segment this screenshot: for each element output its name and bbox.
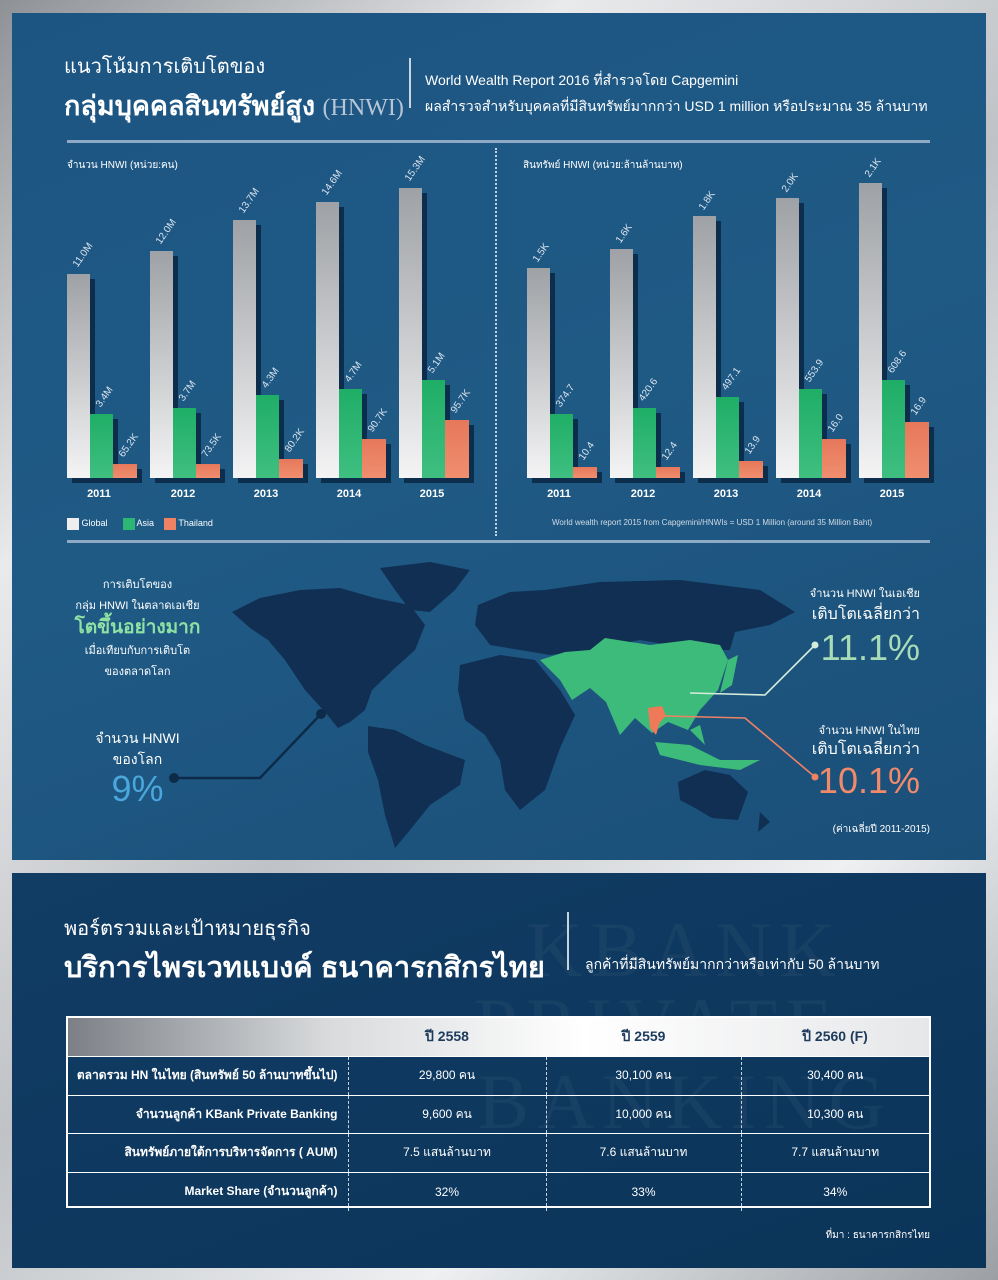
watermark: PRIVATE	[474, 982, 841, 1069]
table: 7.7 แสนล้านบาท	[791, 1145, 879, 1159]
text: 2011	[547, 488, 571, 500]
text: 2.1K	[863, 156, 884, 179]
text: 13.7M	[237, 186, 262, 215]
text: 420.6	[637, 377, 660, 403]
text: 374.7	[554, 383, 577, 409]
text: 80.2K	[283, 427, 307, 454]
heading: private banking: บริการไพรเวทแบงค์ ธนาคารกสิกรไทย	[64, 952, 545, 984]
table: ปี 2560 (F)	[802, 1028, 868, 1044]
title: แนวโน้มการเติบโตของ	[64, 56, 265, 78]
callout: asia growth text: การเติบโตของ	[103, 579, 172, 591]
table: 30,400 คน	[807, 1068, 863, 1082]
callout: asia growth text: โตขึ้นอย่างมาก	[75, 617, 200, 638]
text: 95.7K	[449, 388, 473, 415]
callout: thai 10.1%	[812, 724, 920, 801]
text: 10.4	[577, 440, 597, 462]
text: 4.3M	[260, 366, 282, 390]
table: ตลาดรวม HN ในไทย (สินทรัพย์ 50 ล้านบาทขึ้นไป)	[77, 1068, 338, 1082]
callout: thai 10.1%: เติบโตเฉลี่ยกว่า	[812, 741, 920, 758]
text: 90.7K	[366, 407, 390, 434]
callout: thai 10.1%: จำนวน HNWI ในไทย	[819, 725, 920, 737]
text: 12.4	[660, 440, 680, 462]
callout: asia growth text: เมื่อเทียบกับการเติบโต	[85, 645, 190, 657]
text: 13.9	[743, 434, 763, 456]
text: 2014	[797, 488, 821, 500]
callout: asia 11.1%	[810, 587, 920, 668]
text: 2013	[714, 488, 738, 500]
callout: asia 11.1%: จำนวน HNWI ในเอเชีย	[810, 588, 920, 600]
heading: private banking	[64, 918, 545, 984]
callout: asia growth text: ของตลาดโลก	[104, 666, 170, 678]
note: (ค่าเฉลี่ยปี 2011-2015)	[833, 824, 930, 835]
text: 15.3M	[403, 154, 428, 183]
text: 608.6	[886, 349, 909, 375]
table: สินทรัพย์ภายใต้การบริหารจัดการ ( AUM)	[124, 1145, 338, 1159]
callout: world 9%: 9%	[111, 768, 164, 809]
text: 3.7M	[177, 379, 199, 403]
table: 34%	[823, 1184, 847, 1198]
subtitle: private banking: ลูกค้าที่มีสินทรัพย์มากกว่าหรือเท่ากับ 50 ล้านบาท	[585, 956, 880, 972]
callout: asia 11.1%: 11.1%	[821, 627, 920, 668]
text: 2012	[171, 488, 195, 500]
world map	[169, 562, 818, 848]
subtitle: World Wealth Report 2016 ที่สำรวจโดย Capgemini	[425, 72, 738, 88]
callout: world 9%	[95, 730, 180, 809]
title: กลุ่มบุคคลสินทรัพย์สูง (HNWI)	[64, 91, 404, 121]
table: จำนวนลูกค้า KBank Private Banking	[136, 1107, 338, 1121]
table: Market Share (จำนวนลูกค้า)	[184, 1184, 338, 1198]
text: 1.5K	[531, 241, 552, 264]
heading: private banking: พอร์ตรวมและเป้าหมายธุรกิจ	[64, 918, 311, 940]
table: ปี 2559	[622, 1028, 665, 1044]
subtitle: ผลสำรวจสำหรับบุคคลที่มีสินทรัพย์มากกว่า USD 1 million หรือประมาณ 35 ล้านบาท	[425, 98, 928, 114]
bar chart: HNWI wealth: สินทรัพย์ HNWI (หน่วย:ล้านล้านบาท)	[523, 160, 683, 171]
panel: HNWI growth	[12, 13, 986, 860]
chart source note: World wealth report 2015 from Capgemini/HNWIs = USD 1 Million (around 35 Million Baht)	[552, 518, 872, 527]
callout: asia growth text: กลุ่ม HNWI ในตลาดเอเชีย	[75, 600, 200, 612]
table: 29,800 คน	[419, 1068, 475, 1082]
text: 2015	[420, 488, 444, 500]
text: 12.0M	[154, 217, 179, 246]
table: 10,000 คน	[615, 1107, 672, 1121]
text: 2.0K	[780, 171, 801, 194]
text: 2014	[337, 488, 361, 500]
watermark	[474, 906, 893, 1145]
bar chart: HNWI count: จำนวน HNWI (หน่วย:คน)	[67, 160, 178, 171]
text: 1.8K	[697, 189, 718, 212]
table: 7.5 แสนล้านบาท	[403, 1145, 491, 1159]
text: 65.2K	[117, 432, 141, 459]
callout: asia growth text	[74, 578, 200, 678]
text: 16.0	[826, 412, 846, 434]
table: 32%	[435, 1184, 459, 1198]
text: 14.6M	[320, 168, 345, 197]
text: 3.4M	[94, 385, 116, 409]
callout: world 9%: ของโลก	[113, 751, 162, 767]
source: ที่มา : ธนาคารกสิกรไทย	[826, 1230, 930, 1241]
text: 5.1M	[426, 351, 448, 375]
callout: world 9%: จำนวน HNWI	[95, 730, 180, 746]
text: 16.9	[909, 395, 929, 417]
table: 9,600 คน	[422, 1107, 472, 1121]
callout: asia 11.1%: เติบโตเฉลี่ยกว่า	[812, 606, 920, 623]
text: 4.7M	[343, 360, 365, 384]
table: 30,100 คน	[615, 1068, 672, 1082]
text: 2015	[880, 488, 904, 500]
text: 1.6K	[614, 222, 635, 245]
table: 7.6 แสนล้านบาท	[600, 1145, 687, 1159]
subtitle	[425, 70, 928, 115]
watermark: KBANK	[526, 906, 844, 993]
legend: Global Asia Thailand	[82, 518, 213, 528]
text: 73.5K	[200, 432, 224, 459]
table: 10,300 คน	[807, 1107, 863, 1121]
text: 2011	[87, 488, 111, 500]
text: 553.9	[803, 358, 826, 384]
text: 11.0M	[71, 241, 95, 269]
table: 33%	[631, 1184, 656, 1198]
text: 497.1	[720, 366, 743, 392]
text: 2012	[631, 488, 655, 500]
table	[66, 1016, 931, 1208]
watermark: BANKING	[477, 1058, 893, 1145]
callout: thai 10.1%: 10.1%	[818, 760, 920, 801]
text: 2013	[254, 488, 278, 500]
table: ปี 2558	[425, 1028, 469, 1044]
panel: private banking	[12, 873, 986, 1268]
title	[64, 55, 404, 123]
